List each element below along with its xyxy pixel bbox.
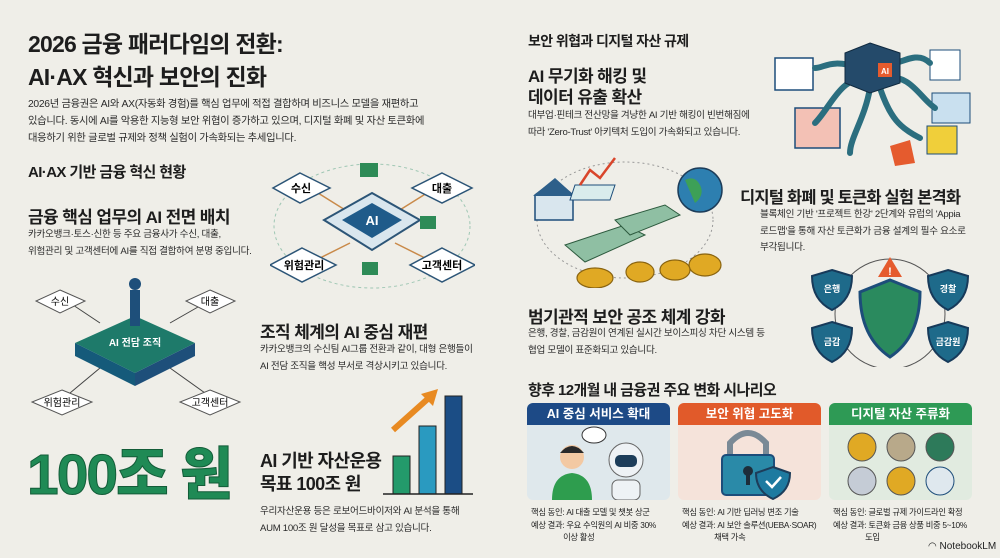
text: 디지털 화폐: 블록체인 기반 '프로젝트 한강' 2단계와 유럽의 'Appia xyxy=(760,209,960,220)
text: 자산운용: AUM 100조 원 달성을 목표로 삼고 있습니다. xyxy=(260,522,431,534)
illustration: shield network: 금감 xyxy=(824,336,841,347)
text: 해킹: 따라 'Zero-Trust' 아키텍처 도입이 가속화되고 있습니다. xyxy=(528,126,740,138)
card: 디지털 자산 주류화: 디지털 자산 주류화 xyxy=(851,407,950,421)
text: 디지털 화폐: 로드맵'을 통해 자산 토큰화가 금융 설계의 필수 요소로 xyxy=(760,226,966,236)
intro text: 2026년 금융권은 AI와 AX(자동화 경험)를 핵심 업무에 적접 결합하며 비즈니스 모델을 재편하고 xyxy=(28,99,418,110)
card text 3: 도입 xyxy=(865,532,880,542)
text: 자산운용 xyxy=(260,506,459,534)
card: AI 중심 서비스 확대 xyxy=(527,403,670,500)
heading: 해킹 xyxy=(528,67,646,107)
illustration: shield network: 금감원 xyxy=(936,336,960,347)
card text 2 xyxy=(682,507,816,542)
text: 보안 공조: 협업 모델이 표준화되고 있습니다. xyxy=(528,344,657,356)
heading: 조직 체계: 조직 체계의 AI 중심 재편 xyxy=(260,323,428,342)
text: 조직 체계: 카카오뱅크의 수신팀 AI그룹 전환과 같이, 대형 은행들이 xyxy=(260,344,473,355)
card text 3: 핵심 동인: 글로벌 규제 가이드라인 확정 xyxy=(833,507,962,517)
card text 1: 예상 결과: 우요 수익원의 AI 비중 30% xyxy=(531,520,656,530)
heading: 디지털 화폐: 디지털 화폐 및 토큰화 실험 본격화 xyxy=(740,189,960,207)
illustration: AI chip xyxy=(270,163,475,288)
card: 보안 위협 고도화 xyxy=(678,403,821,500)
right section heading: 보안 위협과 디지털 자산 규제 xyxy=(528,33,689,49)
illustration: org pyramid: 위험관리 xyxy=(44,396,80,409)
heading: scenarios: 향후 12개월 내 금융권 주요 변화 시나리오 xyxy=(528,382,776,399)
illustration: octopus AI hacker xyxy=(774,42,970,166)
illustration: AI chip: 위험관리 xyxy=(284,258,324,272)
illustration: AI chip: AI xyxy=(366,213,378,228)
text: 보안 공조 xyxy=(528,328,765,356)
illustration: shield network: ! xyxy=(888,266,892,278)
text: AI 전면 배치: 카카오뱅크·토스·신한 등 주요 금융사가 수신, 대출, xyxy=(28,229,221,240)
card text 2: 채택 가속 xyxy=(714,532,745,542)
text: 디지털 화폐 xyxy=(760,208,966,253)
heading: 자산운용 xyxy=(260,451,382,494)
heading: 해킹: AI 무기화 해킹 및 xyxy=(528,67,646,86)
text: 디지털 화폐: 부각됩니다. xyxy=(760,242,805,253)
card text 3 xyxy=(833,507,967,542)
title: 2026 금융 패러다임의 전환: xyxy=(28,31,283,57)
card text 2: 예상 결과: AI 보안 솔루션(UEBA·SOAR) xyxy=(682,520,816,530)
text: AI 전면 배치 xyxy=(28,228,252,256)
heading: 해킹: 데이터 유출 확산 xyxy=(528,88,642,107)
intro text xyxy=(28,98,424,144)
big number: 100조 원: 100조 원 xyxy=(27,443,231,507)
illustration: org pyramid: 수신 xyxy=(51,296,69,308)
card text 2: 핵심 동인: AI 기반 딥러닝 변조 기술 xyxy=(682,507,799,517)
illustration: AI chip: 수신 xyxy=(291,182,311,195)
heading: AI 전면 배치: 금융 핵심 업무의 AI 전면 배치 xyxy=(28,208,230,227)
card text 1: 핵심 동인: AI 대출 모델 및 챗봇 상군 xyxy=(531,507,650,517)
watermark: NotebookLM: ◠ NotebookLM xyxy=(928,541,996,552)
text: 조직 체계 xyxy=(260,344,473,372)
heading: 자산운용: 목표 100조 원 xyxy=(260,474,361,494)
illustration: org pyramid: AI 전담 조직 xyxy=(109,336,161,349)
card text 3: 예상 결과: 토큰화 금융 상품 비중 5~10% xyxy=(833,520,967,530)
illustration: org pyramid xyxy=(30,278,242,416)
illustration: AI chip: 대출 xyxy=(432,181,452,195)
bar chart xyxy=(383,389,473,495)
text: 해킹 xyxy=(528,110,750,138)
illustration: octopus AI hacker: AI xyxy=(881,67,889,76)
intro text: 있습니다. 동시에 AI를 악용한 지능형 보안 위협이 증가하고 있으며, 디지털 화폐 및 자산 토큰화에 xyxy=(28,116,424,127)
card: AI 중심 서비스 확대: AI 중심 서비스 확대 xyxy=(547,407,650,421)
illustration: org pyramid: 대출 xyxy=(201,296,219,308)
card text 1: 이상 활성 xyxy=(563,532,594,542)
illustration: org pyramid: 고객센터 xyxy=(192,397,228,409)
heading: 보안 공조: 범기관적 보안 공조 체계 강화 xyxy=(528,308,725,327)
card text 1 xyxy=(531,507,656,542)
illustration: shield network: 경찰 xyxy=(940,283,957,294)
illustration: shield network xyxy=(811,257,969,367)
text: 조직 체계: AI 전담 조직을 핵성 부서로 격상시키고 있습니다. xyxy=(260,360,447,372)
illustration: shield network: 은행 xyxy=(824,284,840,294)
intro text: 대응하기 위한 글로벌 규제와 정책 실험이 가속화되는 추세입니다. xyxy=(28,133,296,144)
text: 보안 공조: 은행, 경찰, 금감원이 연계된 실시간 보이스피싱 차단 시스템 등 xyxy=(528,328,765,339)
card: 디지털 자산 주류화 xyxy=(829,403,972,500)
illustration: AI chip: 고객센터 xyxy=(422,259,462,272)
text: 해킹: 대부업·핀테크 전산망을 겨냥한 AI 기반 해킹이 빈번해짐에 xyxy=(528,110,750,121)
title xyxy=(28,31,283,90)
text: AI 전면 배치: 위험관리 및 고객센터에 AI를 직접 결합하여 분명 중입니다. xyxy=(28,246,252,256)
illustration: tokenization money flow xyxy=(533,157,723,288)
text: 자산운용: 우리자산운용 등은 로보어드바이저와 AI 분석을 통해 xyxy=(260,506,459,517)
card: 보안 위협 고도화: 보안 위협 고도화 xyxy=(706,407,793,421)
heading: 자산운용: AI 기반 자산운용 xyxy=(260,451,381,471)
section heading: AI·AX: AI·AX 기반 금융 혁신 현황 xyxy=(28,164,186,181)
title: AI·AX 혁신과 보안의 진화 xyxy=(28,64,266,90)
